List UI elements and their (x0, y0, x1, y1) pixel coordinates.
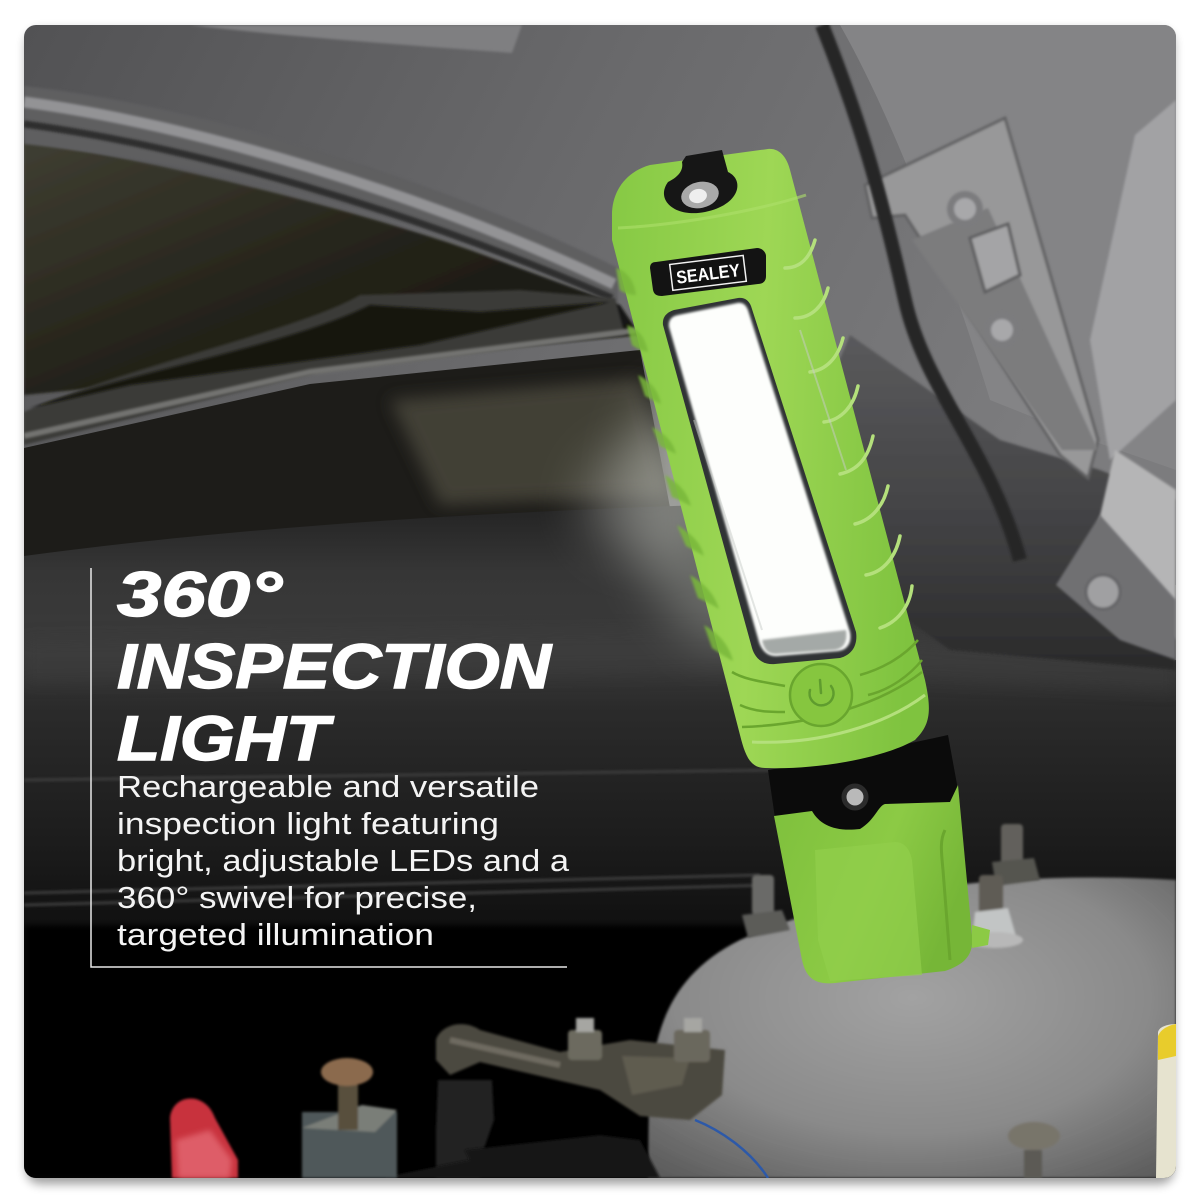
lens grey lower band (762, 630, 846, 654)
top torch mount (664, 150, 737, 213)
inspection lamp (612, 149, 990, 983)
logo frame (670, 255, 746, 290)
lamp glow (599, 376, 801, 664)
right pale strip (1090, 100, 1176, 460)
top trim strip (190, 25, 522, 53)
body line 3: bright, adjustable LEDs and a (117, 843, 570, 878)
battery terminal clamp (436, 1018, 725, 1120)
seal highlights (24, 770, 780, 905)
trim highlight (24, 102, 614, 284)
base foot tab (972, 925, 990, 948)
heading line 2: INSPECTION (117, 632, 553, 702)
heading (117, 560, 553, 774)
frame line (91, 568, 567, 967)
upper bodywork panel (24, 25, 1176, 585)
lower windscreen scuttle (24, 350, 680, 570)
swivel ball (844, 786, 866, 808)
red terminal cover (170, 1098, 238, 1178)
lamp body (612, 149, 929, 768)
hood body (24, 505, 1176, 1178)
logo strip (650, 248, 766, 296)
bracket (865, 118, 1098, 478)
curved chrome trim (24, 86, 618, 304)
right grip ribs (785, 240, 912, 628)
dark mid-right area (840, 335, 1176, 670)
blue wire (695, 1120, 768, 1178)
rubber seal band (24, 630, 1176, 690)
battery tray (380, 1135, 660, 1178)
light window frame (663, 298, 856, 664)
light glow on bodywork (580, 440, 720, 560)
bolt upper (947, 191, 983, 227)
body line 1: Rechargeable and versatile (117, 769, 539, 804)
LED lens (669, 303, 850, 656)
tank stud centre (992, 824, 1040, 886)
right fender panel (840, 25, 1176, 416)
scuttle lit reflection (390, 378, 670, 505)
logo (670, 255, 746, 290)
tank bottom bolt (1008, 1122, 1060, 1178)
heading line 1: 360° (117, 560, 283, 630)
trim groove (24, 124, 612, 298)
yellow cap top (1158, 1024, 1176, 1060)
red terminal highlight (176, 1130, 232, 1178)
text block (91, 560, 570, 967)
top bevel (618, 195, 806, 228)
lens edge shade (694, 330, 846, 630)
body line 2: inspection light featuring (117, 806, 499, 841)
lower right component (1056, 515, 1176, 660)
black cable (822, 25, 1020, 560)
lower engine bay void (24, 925, 824, 1178)
bracket recess (912, 208, 1098, 450)
lower highlight (752, 695, 925, 742)
bracket slot (970, 224, 1020, 292)
lower grooves (732, 640, 922, 727)
bolt lower (990, 318, 1014, 342)
terminal lead (436, 1080, 494, 1178)
body copy (117, 769, 570, 952)
wiper dark arm (30, 302, 610, 408)
left grip notches (616, 268, 733, 661)
power button (790, 664, 852, 726)
tank stud near (967, 875, 1023, 948)
tank dome (648, 878, 1176, 1178)
lamp base (774, 785, 972, 983)
right lower bright body (1098, 451, 1176, 639)
rusty bolt head (302, 1058, 397, 1178)
heading line 3: LIGHT (117, 704, 334, 774)
wiper lower highlight (24, 330, 640, 436)
swivel black joint (768, 735, 960, 840)
torch lens (679, 178, 721, 212)
hex bolt right (1087, 576, 1119, 608)
tank stud left (742, 875, 790, 938)
body line 4: 360° swivel for precise, (117, 880, 477, 915)
yellow cap (1156, 1024, 1176, 1178)
base recess (815, 842, 922, 981)
base right ridge (941, 830, 950, 960)
windscreen (24, 140, 640, 395)
body line 5: targeted illumination (117, 917, 434, 952)
logo text: SEALEY (675, 260, 741, 288)
torch lens glint (688, 187, 708, 205)
wiper blade (24, 290, 625, 445)
power icon (810, 680, 834, 705)
